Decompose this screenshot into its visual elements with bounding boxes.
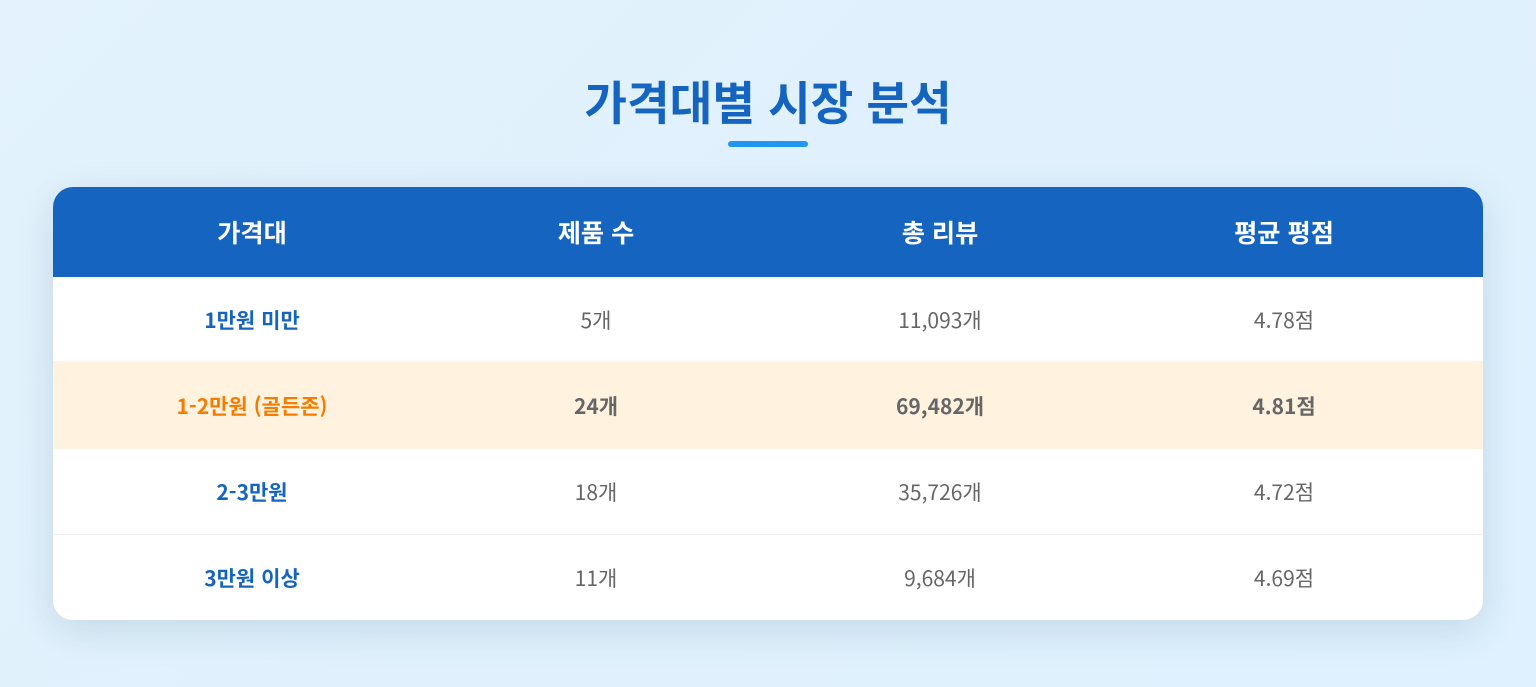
column heading: average rating: 평균 평점 [1234, 214, 1334, 250]
row: 20,000 to 30,000 won [53, 449, 1483, 535]
table shadow [53, 187, 1483, 620]
average rating: 4.81점 [1252, 391, 1316, 421]
title underline [728, 141, 808, 147]
average rating: 4.69점 [1254, 562, 1314, 592]
row: under 10,000 won [204, 305, 1314, 335]
price range label: 1만원 미만 [204, 305, 300, 335]
row: over 30,000 won [204, 562, 1314, 592]
total reviews: 9,684개 [904, 562, 976, 592]
total reviews: 35,726개 [898, 476, 982, 506]
column heading: total reviews: 총 리뷰 [902, 214, 978, 250]
product count: 11개 [575, 562, 617, 592]
panel: price range table [53, 187, 1483, 620]
price range label: 1-2만원 (골든존) [177, 391, 327, 421]
price range label: 3만원 이상 [204, 562, 300, 592]
total reviews: 11,093개 [898, 305, 982, 335]
product count: 24개 [574, 391, 618, 421]
total reviews: 69,482개 [896, 391, 984, 421]
column heading: price range: 가격대 [217, 214, 287, 250]
title: 가격대별 시장 분석 [584, 67, 952, 134]
table header row [53, 187, 1483, 277]
price range label: 2-3만원 [216, 476, 288, 506]
average rating: 4.78점 [1254, 305, 1314, 335]
average rating: 4.72점 [1254, 476, 1314, 506]
product count: 5개 [580, 305, 611, 335]
row: golden zone highlight [53, 361, 1483, 449]
column heading: product count: 제품 수 [558, 214, 634, 250]
product count: 18개 [575, 476, 617, 506]
